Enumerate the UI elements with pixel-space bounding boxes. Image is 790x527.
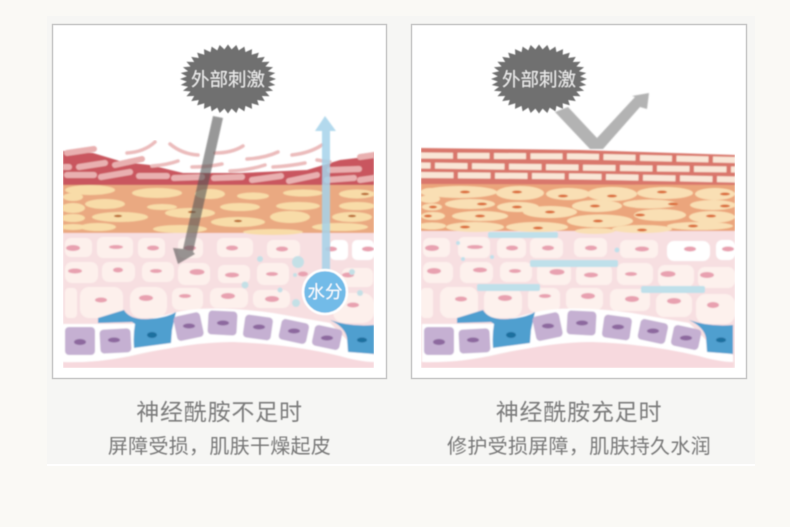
basal layer right bbox=[422, 308, 733, 368]
panel frame left bbox=[52, 24, 386, 378]
lower pink layer left bbox=[63, 231, 374, 368]
bricks left bbox=[65, 149, 374, 181]
burst: external irritation right bbox=[491, 44, 587, 114]
skin cross-section right bbox=[418, 148, 736, 368]
bricks right bbox=[421, 156, 735, 180]
orange fat layer left bbox=[63, 183, 374, 233]
arrow: water escaping upward bbox=[315, 116, 336, 272]
arrow: irritant deflected bbox=[555, 93, 649, 149]
caption right description: 修护受损屏障，肌肤持久水润 bbox=[447, 435, 711, 458]
cell nuclei right bbox=[425, 245, 734, 308]
purple basal cells bbox=[65, 310, 343, 355]
epidermal cells left bbox=[65, 237, 374, 323]
caption right heading: 神经酰胺充足时 bbox=[496, 399, 662, 425]
healthy corneum bbox=[421, 148, 735, 185]
white basement band bbox=[63, 308, 374, 363]
melanocytes bbox=[98, 310, 176, 348]
epidermal cells right bbox=[421, 237, 735, 324]
cell nuclei left bbox=[66, 245, 374, 308]
peeling flakes bbox=[127, 142, 330, 171]
arrow: irritant penetrating bbox=[173, 116, 223, 264]
caption left heading: 神经酰胺不足时 bbox=[136, 399, 303, 425]
fat nuclei right bbox=[424, 190, 730, 232]
caption left description: 屏障受损，肌肤干燥起皮 bbox=[108, 435, 331, 458]
burst: external irritation left bbox=[180, 44, 276, 114]
burst: external irritation right: 外部刺激 bbox=[502, 69, 576, 90]
orange fat layer right bbox=[421, 183, 735, 231]
lower pink layer right bbox=[421, 231, 735, 368]
water droplets left bbox=[242, 256, 363, 307]
damaged red corneum bbox=[63, 151, 374, 185]
panel: with ceramide bbox=[412, 24, 746, 378]
skin cross-section left bbox=[60, 142, 375, 368]
ceramide moisture bars bbox=[456, 232, 705, 293]
panel: without ceramide bbox=[52, 24, 386, 378]
background card bbox=[47, 16, 755, 464]
icon: water bubble: 水分 bbox=[308, 282, 342, 302]
basal layer bbox=[63, 308, 374, 368]
cream cells right bbox=[418, 186, 736, 234]
fat nuclei left bbox=[114, 193, 369, 222]
icon: water bubble bbox=[303, 270, 347, 314]
infographic bbox=[47, 24, 755, 466]
pink dermis dome bbox=[63, 342, 374, 368]
burst: external irritation left: 外部刺激 bbox=[191, 69, 265, 90]
panel frame right bbox=[412, 24, 746, 378]
cream cells left bbox=[60, 185, 375, 235]
